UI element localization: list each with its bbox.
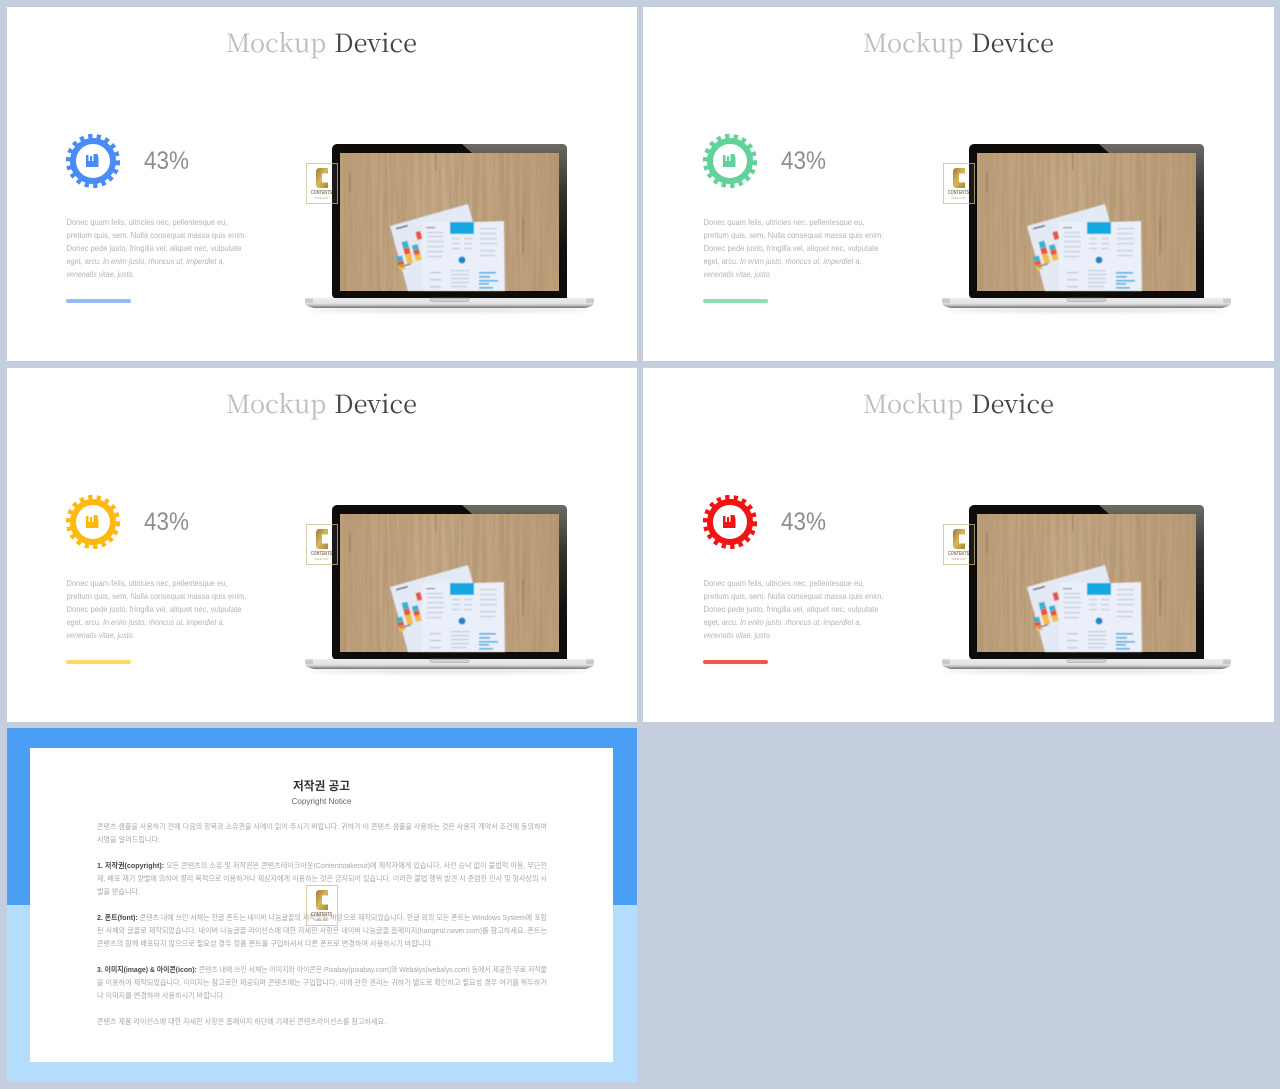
section 2 font: 콘텐츠의 함께 배포되지 않으므로 필요성 경우 정품 폰트를 구입하셔서 다른 폰트로 변경하여 사용하시기 바랍니다. [97,938,433,948]
section 1 copyright: 벌을 받습니다. [97,886,140,896]
copyright heading: 저작권 공고 [293,778,350,793]
icon: gear [68,136,118,186]
laptop [305,505,594,673]
text block: eget, arcu. In enim justo, rhoncus ut, imperdiet a, [66,618,224,627]
logo watermark: CONTENTS [948,190,970,196]
accent bar [66,299,131,303]
percentage: 43% [144,147,189,175]
text block: eget, arcu. In enim justo, rhoncus ut, imperdiet a, [704,618,862,627]
percentage: 43% [144,508,189,536]
icon: gear [705,497,755,547]
panel: mockup device red [643,368,1274,722]
closing note: 콘텐츠 제품 라이선스에 대한 자세한 사항은 홈페이지 하단에 기재된 콘텐츠라이선스를 참고하세요. [97,1016,386,1026]
percentage: 43% [781,147,826,175]
laptop [942,505,1231,673]
text block: Donec quam felis, ultricies nec, pellentesque eu, [66,579,228,588]
intro text: 서명을 알려드립니다. [97,834,160,844]
text block: eget, arcu. In enim justo, rhoncus ut, imperdiet a, [66,257,224,266]
text block: Donec pede justo, fringilla vel, aliquet nec, vulputate [66,244,242,253]
accent bar [703,660,768,664]
text block: pretium quis, sem. Nulla consequat massa quis enim. [704,231,884,240]
text block: venenatis vitae, justo. [704,270,772,279]
section 2 font: 된 서체와 글꼴로 제작되었습니다. 네이버 나눔글꼴 라이선스에 대한 자세한 사항은 네이버 나눔글꼴 홈페이지(hangeul.naver.com)를 참고하세요. 폰트는 [97,925,547,935]
panel: mockup device blue [7,7,637,361]
logo watermark: TAKE OUT [314,918,329,922]
logo watermark [944,164,974,204]
text block: Donec quam felis, ultricies nec, pellentesque eu, [704,218,864,227]
title: Mockup Device [863,385,1054,421]
text block [704,579,884,640]
section 3 image and icon: 나 이미지를 변경하여 사용하시기 바랍니다. [97,990,225,1000]
logo watermark: CONTENTS [948,551,970,557]
text block: Donec pede justo, fringilla vel, aliquet nec, vulputate [704,244,879,253]
text block: Donec quam felis, ultricies nec, pellentesque eu, [66,218,228,227]
text block: pretium quis, sem. Nulla consequat massa quis enim. [66,231,246,240]
text block: pretium quis, sem. Nulla consequat massa quis enim. [704,592,884,601]
panel: copyright notice [7,728,637,1082]
logo watermark: TAKE OUT [314,557,329,561]
text block: Donec pede justo, fringilla vel, aliquet nec, vulputate [66,605,242,614]
text block: Donec quam felis, ultricies nec, pellentesque eu, [704,579,864,588]
text block [66,579,246,640]
logo watermark: CONTENTS [311,551,333,557]
logo watermark: TAKE OUT [951,557,966,561]
logo watermark [306,524,338,564]
text block: pretium quis, sem. Nulla consequat massa quis enim. [66,592,246,601]
icon: gear [68,497,118,547]
intro text [97,821,547,844]
title: Mockup Device [226,385,417,421]
text block: eget, arcu. In enim justo, rhoncus ut, imperdiet a, [704,257,862,266]
logo watermark: TAKE OUT [951,196,966,200]
text block [66,218,246,279]
section 2 font: 2. 폰트(font): 콘텐츠 내에 쓰인 서체는 한글 폰트는 네이버 나눔글꼴의 저작물을 바탕으로 제작되었습니다. 한글 외의 모든 폰트는 Windows System에 포함 [97,912,547,922]
section 1 copyright: 1. 저작권(copyright): 모든 콘텐츠의 소유 및 저작권은 콘텐츠테이크아웃(Contentstakeout)에 제작자에게 있습니다. 사전 승낙 없이 불법적 이용, 무단전 [97,860,547,870]
section 3 image and icon: 을 이용하여 제작되었습니다. 이미지는 참고로만 제공되며 콘텐츠에는 구입합니다. 이에 관한 권리는 귀하가 별도로 확인하고 필요성 경우 여기를 위두하거 [97,977,547,987]
copyright subheading: Copyright Notice [292,796,352,806]
intro text: 콘텐츠 샘플을 사용하기 전에 다음의 항목과 소유권을 사례이 읽어 주시기 바랍니다. 귀하가 이 콘텐츠 샘플을 사용하는 것은 사용자 계약서 조건에 동의하여 [97,821,547,831]
logo watermark: TAKE OUT [314,196,329,200]
text block: venenatis vitae, justo. [66,270,134,279]
logo watermark [944,524,974,564]
title: Mockup Device [863,24,1054,60]
logo watermark [306,886,338,926]
title: Mockup Device [226,24,417,60]
section 2 font [97,912,547,948]
panel: mockup device green [643,7,1274,361]
text block [704,218,884,279]
section 3 image and icon [97,964,547,1000]
logo watermark [306,164,338,204]
laptop [942,144,1231,312]
panel: mockup device yellow [7,368,637,722]
section 1 copyright: 재, 배포 재기 양벌에 의하여 영리 목적으로 이용하거나 제삼자에게 이용하는 것은 금지되어 있습니다. 이러한 불법 행위 발견 시 준엄한 민사 및 형사상의 시 [97,873,547,883]
text block: Donec pede justo, fringilla vel, aliquet nec, vulputate [704,605,879,614]
text block: venenatis vitae, justo. [66,631,134,640]
percentage: 43% [781,508,826,536]
accent bar [703,299,768,303]
section 1 copyright [97,860,547,896]
text block: venenatis vitae, justo. [704,631,772,640]
accent bar [66,660,131,664]
icon: gear [705,136,755,186]
logo watermark: CONTENTS [311,912,333,918]
logo watermark: CONTENTS [311,190,333,196]
laptop [305,144,594,312]
section 3 image and icon: 3. 이미지(image) & 아이콘(icon): 콘텐츠 내에 쓰인 서체는 이미지와 아이콘은 Pixabay(pixabay.com)와 Webalys(webalys.com) 등에서 제공한 무료 저작물 [97,964,547,974]
